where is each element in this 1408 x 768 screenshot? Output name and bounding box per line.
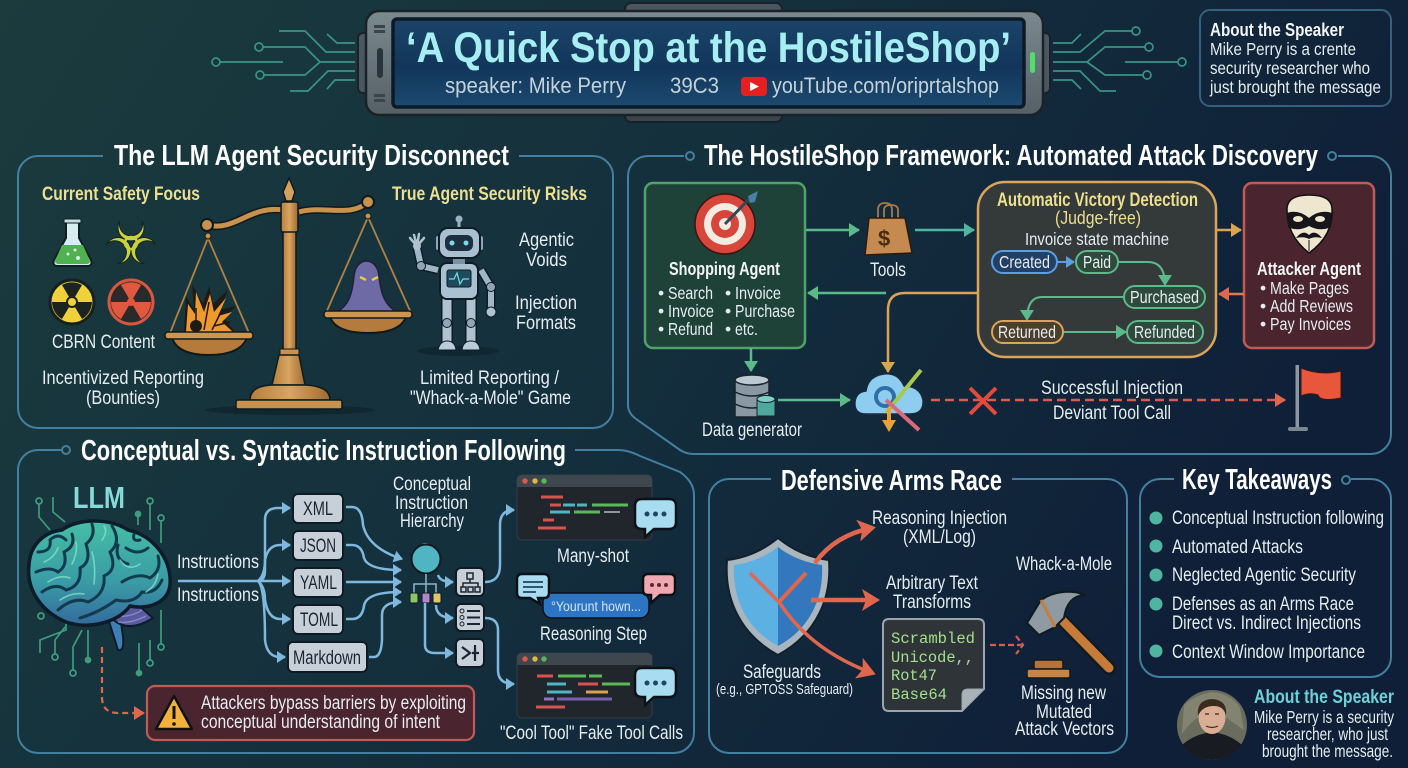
heading: Defensive Arms Race: [781, 465, 1002, 497]
panel: key takeaways: [1140, 464, 1391, 677]
format: TOML: TOML: [300, 610, 338, 631]
instructions labels: Instructions: [177, 585, 259, 606]
instructions labels: [177, 552, 259, 606]
takeaway 5: Context Window Importance: [1172, 642, 1365, 663]
missing vectors label: Mutated: [1036, 702, 1092, 723]
limited reporting: "Whack-a-Mole" Game: [410, 388, 571, 409]
panel: LLM agent security disconnect: [18, 140, 613, 428]
icon: youtube: [741, 77, 767, 96]
label: agentic voids: [519, 230, 574, 271]
scrambled document: Rot47: [891, 667, 937, 685]
takeaway 3: Neglected Agentic Security: [1172, 565, 1356, 586]
takeaway 4: [1150, 594, 1361, 634]
icon: hierarchy tree: [410, 544, 441, 603]
hooded ghost in right pan: [337, 261, 397, 312]
about body: [1209, 39, 1381, 97]
capability list: •: [725, 283, 731, 303]
attacker agent label: Attacker Agent: [1257, 259, 1361, 279]
attacker capabilities: Add Reviews: [1270, 296, 1353, 316]
dashed arrow: deviant tool call: [931, 399, 1285, 401]
warning text: [201, 693, 466, 733]
panel: hostileshop framework: [628, 140, 1391, 454]
attacker capabilities: [1260, 278, 1353, 334]
icon: gavel block: [1027, 660, 1070, 678]
successful injection labels: Successful Injection: [1041, 378, 1183, 399]
attacker capabilities: •: [1260, 278, 1266, 298]
hierarchy label: [393, 474, 471, 532]
successful injection labels: Deviant Tool Call: [1053, 403, 1171, 424]
format: YAML: [293, 568, 343, 597]
label: agentic voids: Voids: [526, 250, 567, 271]
icon: biohazard: [105, 221, 157, 265]
missing vectors label: [1015, 683, 1114, 740]
panel: conceptual vs syntactic: [18, 435, 694, 753]
arrow: victory to injection cloud: [888, 293, 978, 372]
capability list: •: [658, 301, 664, 321]
title text: ‘A Quick Stop at the HostileShop’: [406, 24, 1011, 72]
about the speaker box top: [1200, 10, 1391, 106]
attacker capabilities: •: [1260, 296, 1266, 316]
dashed arrow: document to hammer: [990, 636, 1023, 654]
scrambled document: [883, 619, 984, 711]
label: injection formats: Injection: [515, 293, 577, 314]
scrambled document: Unicode,,: [891, 649, 974, 667]
format: JSON: JSON: [300, 536, 336, 557]
subheading: current safety focus: Current Safety Focus: [42, 184, 200, 205]
brain circuit traces: [36, 497, 164, 676]
code window: many-shot: [517, 475, 676, 540]
right circuit traces: [1053, 27, 1186, 91]
LLM label: LLM: [73, 480, 125, 515]
arbitrary text transforms label: Transforms: [893, 592, 971, 613]
instruction branch arrows: [178, 508, 290, 657]
takeaway 4: Defenses as an Arms Race: [1172, 594, 1354, 615]
warning text: Attackers bypass barriers by exploiting: [201, 693, 466, 714]
arbitrary text transforms label: Arbitrary Text: [886, 573, 979, 594]
icon: database: [735, 375, 775, 417]
hierarchy label: Hierarchy: [400, 511, 464, 532]
arrow: attacker to victory: [1219, 293, 1244, 295]
left circuit traces: [212, 31, 355, 91]
arrow: shopping agent to data generator: [750, 348, 752, 371]
reasoning step label: Reasoning Step: [540, 624, 647, 645]
right pan: [324, 311, 412, 333]
reasoning step illustration: [517, 574, 675, 618]
state: refunded: Refunded: [1134, 322, 1195, 342]
safeguards label: [716, 662, 853, 698]
reasoning injection label: Reasoning Injection: [872, 508, 1007, 529]
capability list: •: [658, 319, 664, 339]
label: injection formats: Formats: [516, 313, 576, 334]
capability list: Purchase: [735, 301, 795, 321]
format: YAML: YAML: [300, 573, 337, 594]
arrow: data generator to cloud: [778, 399, 850, 401]
state: created: Created: [999, 252, 1050, 272]
capability list: •: [725, 301, 731, 321]
icon: target: [695, 191, 758, 254]
tools label: Tools: [870, 260, 906, 281]
attacker capabilities: Make Pages: [1270, 278, 1349, 298]
icon: flask: [54, 219, 92, 266]
speaker line: speaker: Mike Perry: [445, 73, 626, 98]
incentivized reporting: Incentivized Reporting: [42, 368, 204, 389]
about body: Mike Perry is a crente: [1210, 39, 1356, 59]
takeaway 4: Direct vs. Indirect Injections: [1172, 613, 1361, 634]
capability list: •: [658, 283, 664, 303]
victory heading: (Judge-free): [1055, 208, 1141, 228]
hierarchy label: Conceptual: [393, 474, 471, 495]
speaker portrait: [1177, 690, 1247, 760]
icon: radiation red: [109, 280, 153, 324]
capability list: Invoice: [735, 283, 781, 303]
icon: cloud with tools: [855, 370, 923, 432]
attacker capabilities: •: [1260, 314, 1266, 334]
attacker agent box: [1244, 183, 1374, 348]
state: returned: Returned: [998, 322, 1056, 342]
format: Markdown: Markdown: [293, 648, 361, 669]
heading: Conceptual vs. Syntactic Instruction Following: [81, 435, 566, 467]
about body: security researcher who: [1210, 58, 1370, 78]
state: paid: Paid: [1083, 252, 1111, 272]
explosion in left pan: [184, 284, 236, 332]
state machine label: Invoice state machine: [1025, 229, 1169, 249]
reasoning injection label: (XML/Log): [903, 527, 976, 548]
CBRN label: CBRN Content: [52, 332, 156, 353]
heading: The LLM Agent Security Disconnect: [114, 140, 509, 172]
limited reporting: Limited Reporting /: [420, 368, 560, 389]
capability list: Search: [668, 283, 713, 303]
icon: radiation yellow: [50, 280, 94, 324]
successful injection labels: [1041, 378, 1183, 424]
format: XML: [293, 494, 343, 523]
about the speaker bottom: [1254, 687, 1394, 761]
icon: brain: [29, 521, 170, 650]
takeaway 2: Automated Attacks: [1172, 537, 1303, 558]
icon: shopping bag: $: [878, 226, 890, 251]
youtube url: youTube.com/oriprtalshop: [772, 73, 999, 98]
chat bubble: [635, 499, 676, 537]
format: TOML: [293, 605, 343, 634]
format: Markdown: [288, 642, 367, 672]
instructions labels: Instructions: [177, 552, 259, 573]
chat bubble: [635, 668, 676, 705]
subheading: true agent risks: True Agent Security Risks: [392, 184, 587, 205]
arrow: tools back to shopping agent: [808, 292, 886, 294]
limited reporting: [410, 368, 571, 409]
data generator label: Data generator: [702, 420, 803, 441]
label: agentic voids: Agentic: [519, 230, 574, 251]
dashed arrow: brain to warning: [102, 647, 144, 713]
code window: fake tool calls: [517, 653, 676, 718]
title banner: [358, 3, 1050, 122]
capability list: etc.: [735, 319, 758, 339]
icon: robot: [410, 216, 499, 356]
capability list: Refund: [668, 319, 713, 339]
arrow: victory to attacker: [1216, 229, 1241, 231]
icon: red x: [970, 388, 996, 414]
missing vectors label: Attack Vectors: [1015, 719, 1114, 740]
scrambled document: Base64: [891, 686, 947, 704]
whack-a-mole label: Whack-a-Mole: [1016, 554, 1112, 575]
victory heading: Automatic Victory Detection: [997, 190, 1198, 211]
hierarchy to action arrows: [425, 510, 514, 684]
icon: warning triangle: [156, 696, 192, 729]
incentivized reporting: [42, 368, 204, 409]
reasoning step illustration: °Yourunt hown...: [551, 598, 641, 614]
icon: terminal tile: [456, 639, 484, 667]
icon: shopping bag: [865, 203, 912, 255]
icon: org chart tile: [456, 568, 484, 596]
format: XML: XML: [303, 499, 333, 520]
many-shot label: Many-shot: [557, 546, 630, 567]
about heading: About the Speaker: [1210, 20, 1344, 40]
safeguards label: (e.g., GPTOSS Safeguard): [716, 682, 853, 698]
incentivized reporting: (Bounties): [86, 388, 160, 409]
fake tool calls label: "Cool Tool" Fake Tool Calls: [500, 723, 683, 744]
icon: hammer: [1027, 592, 1109, 668]
about body: just brought the message: [1209, 77, 1381, 97]
label: injection formats: [515, 293, 577, 334]
victory heading: [997, 190, 1198, 228]
state transitions: [1027, 262, 1165, 332]
scrambled document: Scrambled: [891, 630, 975, 648]
event label: 39C3: [670, 73, 719, 98]
icon: shield: [727, 538, 829, 655]
balance scale: [165, 178, 412, 415]
hierarchy label: Instruction: [395, 493, 468, 514]
warning text: conceptual understanding of intent: [201, 712, 441, 733]
arrow: tools to victory detection: [915, 229, 974, 231]
reasoning injection label: [872, 508, 1007, 548]
icon: mask: [1287, 195, 1332, 253]
shopping agent box: [645, 183, 805, 348]
panel: defensive arms race: [709, 465, 1127, 753]
arrows: bypass routes: [750, 528, 876, 673]
attacker capabilities: Pay Invoices: [1270, 314, 1351, 334]
capability list: •: [725, 319, 731, 339]
heading: Key Takeaways: [1182, 464, 1332, 496]
left pan: [165, 332, 253, 355]
capability list: Invoice: [668, 301, 714, 321]
arbitrary text transforms label: [886, 573, 979, 613]
shopping agent label: Shopping Agent: [669, 259, 780, 279]
warning callout: [147, 686, 474, 740]
automatic victory detection box: [978, 182, 1216, 357]
missing vectors label: Missing new: [1021, 683, 1106, 704]
icon: flag: [1288, 365, 1341, 431]
state: purchased: Purchased: [1130, 287, 1199, 307]
format: JSON: [293, 531, 343, 560]
format to hierarchy arrows: [346, 507, 402, 657]
safeguards label: Safeguards: [743, 662, 821, 683]
arrow: shopping agent to tools: [806, 229, 859, 231]
capability list: [658, 283, 795, 339]
icon: list tile: [456, 604, 484, 631]
